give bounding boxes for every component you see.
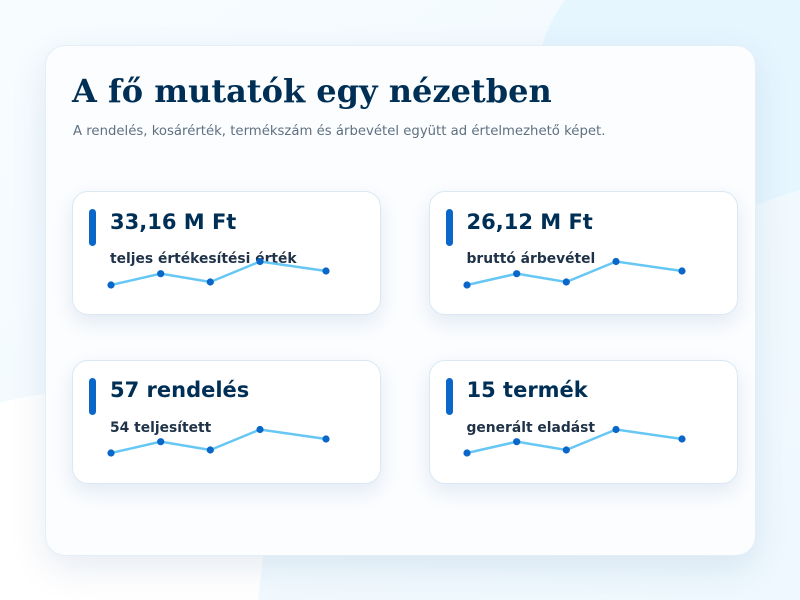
panel: products: generált eladást (466, 420, 595, 436)
panel: main card (44, 44, 756, 556)
panel: total sales value (72, 190, 381, 314)
panel: orders: 54 teljesített (110, 420, 211, 436)
subtitle: A rendelés, kosárérték, termékszám és árbevétel együtt ad értelmezhető képet. (73, 124, 605, 139)
panel: orders: 57 rendelés (110, 378, 249, 402)
panel: gross revenue: 26,12 M Ft (466, 210, 593, 234)
panel: orders (72, 360, 381, 484)
title: A fő mutatók egy nézetben (72, 72, 552, 110)
sparkline: total sales value (107, 258, 330, 289)
panel: products: 15 termék (466, 378, 588, 402)
sparkline: orders (107, 426, 330, 457)
panel: gross revenue: bruttó árbevétel (466, 250, 595, 266)
panel: total sales value: 33,16 M Ft (110, 210, 236, 234)
sparkline: gross revenue (463, 258, 686, 289)
sparkline: products (463, 426, 686, 457)
panel: products (428, 360, 738, 484)
panel: total sales value: teljes értékesítési érték (110, 250, 297, 266)
panel: gross revenue (428, 190, 738, 314)
